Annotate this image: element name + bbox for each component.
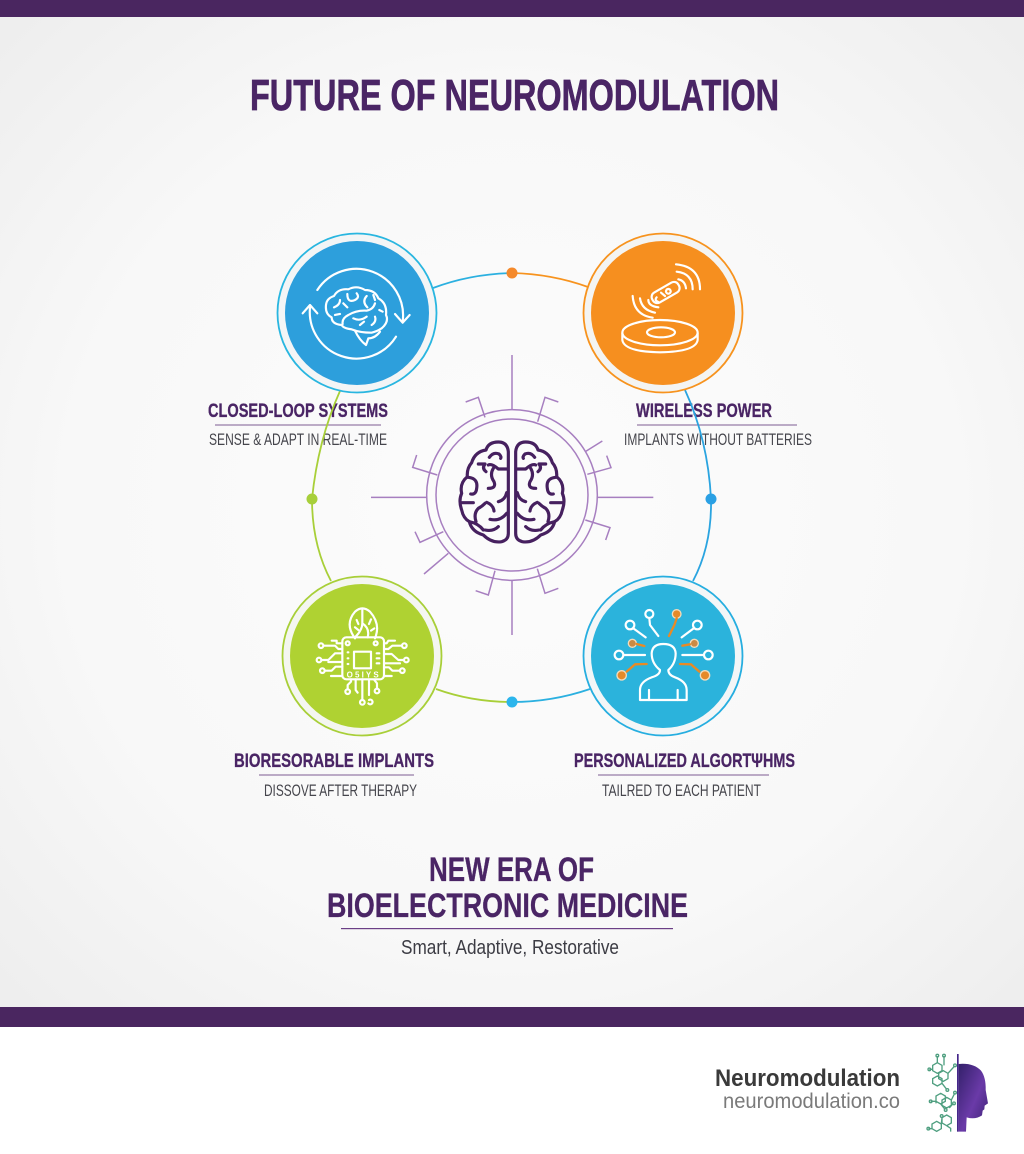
hub circuit ticks <box>371 355 653 635</box>
heading: bioresorable implants: BIORESORABLE IMPLANTS <box>234 751 434 772</box>
heading line one: NEW ERA OF <box>429 851 594 889</box>
logo face <box>959 1064 988 1132</box>
logo: molecule and face <box>927 1054 988 1132</box>
central hub: brain <box>371 355 653 635</box>
caption: implants without batteries: IMPLANTS WITHOUT BATTERIES <box>624 430 812 449</box>
title: FUTURE OF NEUROMODULATION <box>250 71 779 120</box>
chip lettering: O5IYS <box>347 671 379 680</box>
ring dot: right <box>706 494 716 504</box>
heading: personalized algorithms: PERSONALIZED ALGORTΨHMS <box>574 751 795 772</box>
label: bioresorable implants <box>234 751 434 800</box>
icon: wireless charger <box>622 264 700 352</box>
icon: chip with dissolving leaf <box>317 608 409 705</box>
bottom bar <box>0 1007 1024 1027</box>
ring dot: bottom <box>506 696 518 708</box>
closing statement <box>327 851 688 959</box>
label: wireless power <box>624 401 812 449</box>
node: bioresorable implants <box>282 576 442 736</box>
icon: person with algorithm nodes <box>615 610 713 700</box>
logo molecules <box>927 1054 956 1132</box>
brand url: neuromodulation.co <box>723 1090 900 1113</box>
node: closed-loop systems <box>278 234 436 392</box>
hub rings <box>427 410 597 580</box>
heading: closed-loop systems: CLOSED-LOOP SYSTEMS <box>208 401 388 422</box>
footer background <box>0 1027 1024 1154</box>
ring dot: top <box>506 268 518 278</box>
ring dot: left <box>306 494 318 504</box>
icon: brain with loop arrows <box>303 269 410 359</box>
node: wireless power <box>584 234 742 392</box>
node: personalized algorithms <box>584 576 742 736</box>
caption: sense and adapt: SENSE & ADAPT IN REAL-TIME <box>209 430 387 449</box>
caption: dissove after therapy: DISSOVE AFTER THERAPY <box>264 781 417 800</box>
label: closed-loop systems <box>208 401 388 449</box>
heading line two: BIOELECTRONIC MEDICINE <box>327 887 688 925</box>
label: personalized algorithms <box>574 751 795 800</box>
brand name: Neuromodulation <box>715 1065 900 1092</box>
logo divider <box>957 1054 959 1132</box>
heading: wireless power: WIRELESS POWER <box>636 401 772 422</box>
tagline: Smart, Adaptive, Restorative <box>401 936 619 959</box>
caption: tailred to each patient: TAILRED TO EACH PATIENT <box>602 781 761 800</box>
top bar <box>0 0 1024 17</box>
brain right hemisphere <box>516 442 564 542</box>
brain left hemisphere <box>460 442 508 542</box>
connecting ring <box>306 268 716 708</box>
